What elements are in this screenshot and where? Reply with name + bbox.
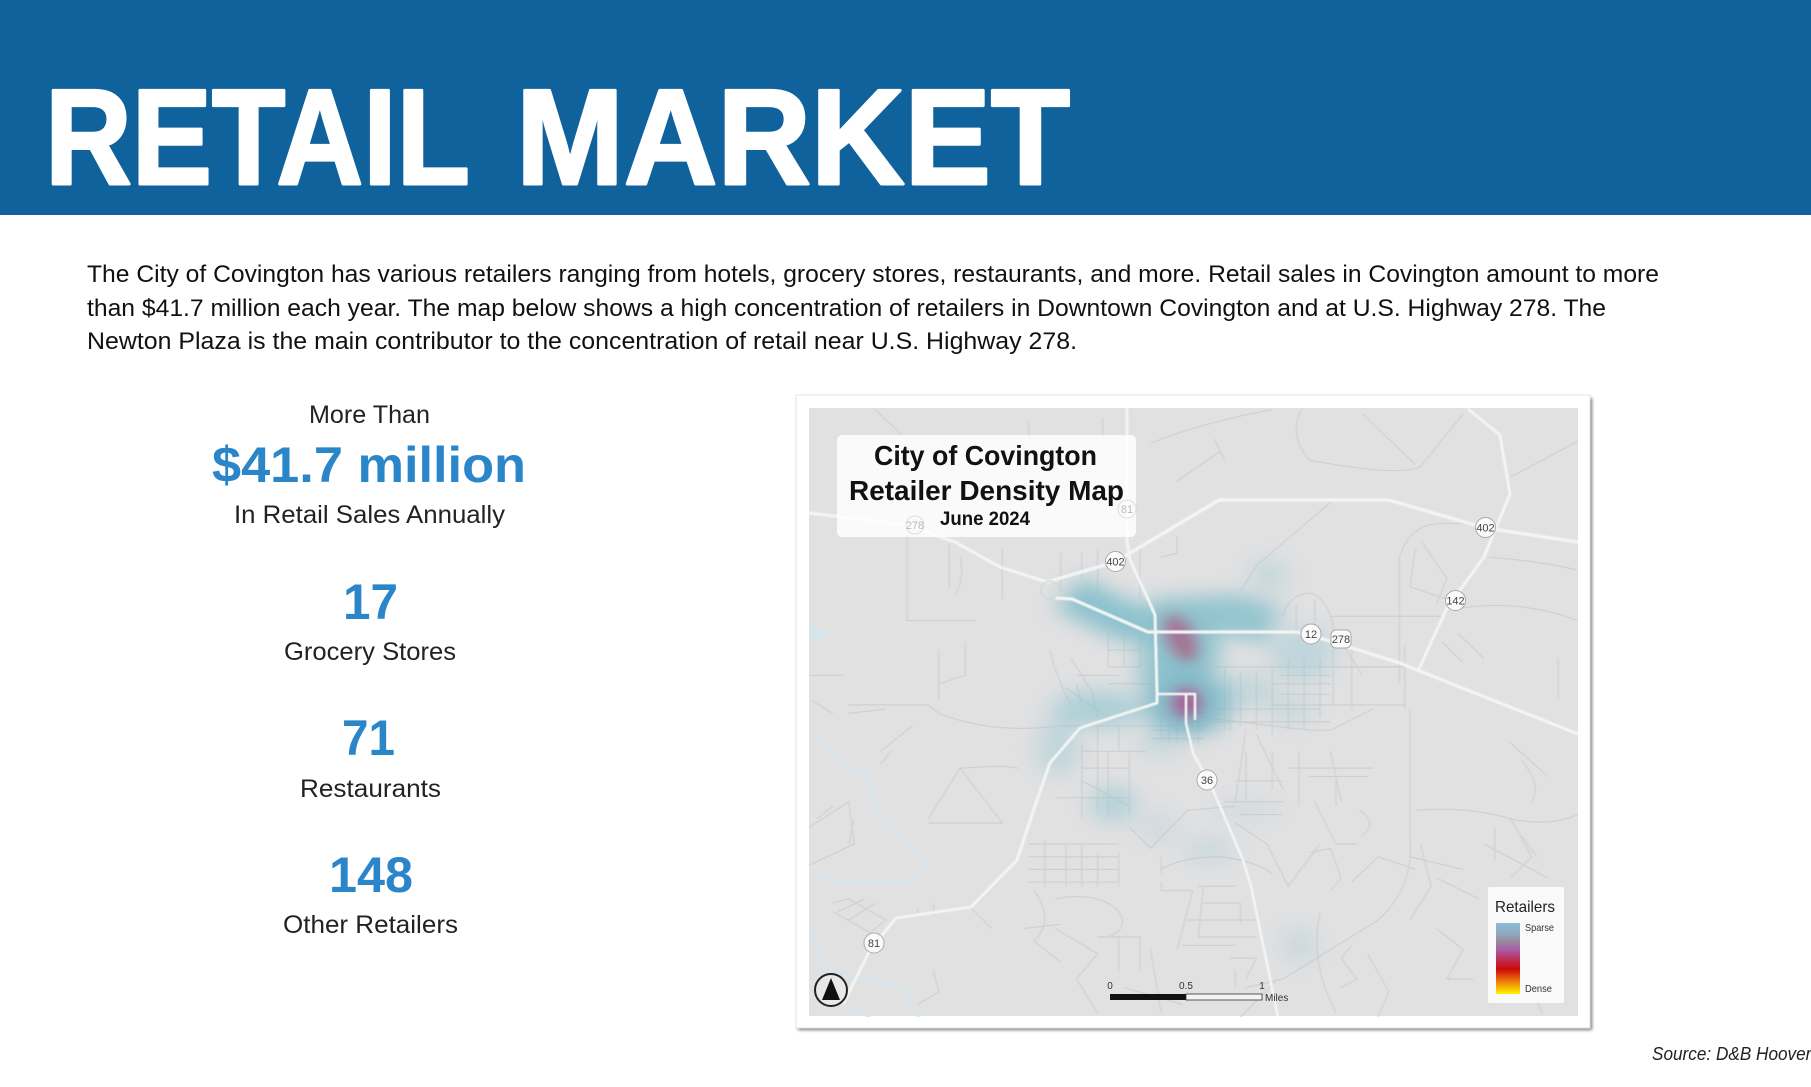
stat: other retailers: 148 bbox=[329, 847, 413, 903]
scale bar: 1 bbox=[1259, 981, 1265, 992]
highways bbox=[809, 408, 1578, 1017]
scale bar: 0.5 bbox=[1179, 981, 1193, 992]
stat: retail sales: $41.7 million bbox=[212, 437, 526, 493]
stat: grocery stores: Grocery Stores bbox=[284, 638, 456, 666]
intro paragraph: The City of Covington has various retailers ranging from hotels, grocery stores, restaurants, and more. Retail sales in Covington amount to more bbox=[87, 261, 1659, 288]
intro paragraph: than $41.7 million each year. The map below shows a high concentration of retailers in Downtown Covington and at U.S. Highway 278. The bbox=[87, 295, 1606, 322]
retailer density heat bbox=[1038, 558, 1333, 963]
map title box bbox=[837, 435, 1136, 537]
highway shields: 142 bbox=[1446, 596, 1465, 608]
intro paragraph: Newton Plaza is the main contributor to the concentration of retail near U.S. Highway 278. bbox=[87, 328, 1077, 355]
stat: other retailers bbox=[283, 847, 458, 939]
map base: water, streets and heat bbox=[809, 410, 1578, 1017]
title: MARKET bbox=[516, 61, 1070, 213]
icon: north arrow bbox=[815, 974, 847, 1006]
density legend bbox=[1488, 887, 1564, 1003]
scale bar: 0 bbox=[1107, 981, 1113, 992]
header banner bbox=[0, 0, 1811, 215]
map title box: City of Covington bbox=[874, 440, 1097, 471]
street network bbox=[809, 410, 1578, 1017]
stat: other retailers: Other Retailers bbox=[283, 911, 458, 939]
intro paragraph bbox=[87, 261, 1659, 355]
title bbox=[45, 61, 1070, 213]
density legend: Sparse bbox=[1525, 922, 1554, 934]
stat: retail sales: More Than bbox=[309, 401, 430, 429]
rivers bbox=[809, 629, 928, 1017]
highway shields: 278 bbox=[1332, 634, 1350, 646]
stat: grocery stores: 17 bbox=[343, 574, 398, 630]
stat: restaurants bbox=[300, 710, 441, 803]
highway shields: 278 bbox=[906, 520, 924, 532]
stat: restaurants: 71 bbox=[342, 710, 395, 766]
stats column bbox=[212, 401, 526, 939]
title: RETAIL bbox=[45, 61, 470, 213]
highway shields: 81 bbox=[1121, 504, 1133, 516]
stat: retail sales: In Retail Sales Annually bbox=[234, 501, 506, 529]
map title box: Retailer Density Map bbox=[849, 475, 1124, 506]
scale bar: Miles bbox=[1265, 993, 1288, 1004]
highway shields: 402 bbox=[1476, 522, 1495, 534]
highway shields: 81 bbox=[868, 938, 880, 950]
density legend: Dense bbox=[1525, 983, 1552, 995]
highway shields bbox=[864, 500, 1496, 953]
scale bar bbox=[1107, 981, 1288, 1004]
panel: retailer density map bbox=[796, 395, 1592, 1030]
density legend: Retailers bbox=[1495, 899, 1555, 916]
stat: retail sales bbox=[212, 401, 526, 529]
stat: restaurants: Restaurants bbox=[300, 775, 441, 803]
highway shields: 402 bbox=[1106, 556, 1125, 568]
highway shields: 36 bbox=[1201, 775, 1213, 787]
highway shields: 12 bbox=[1305, 629, 1317, 641]
stat: grocery stores bbox=[284, 574, 456, 666]
map title box: June 2024 bbox=[940, 509, 1030, 530]
